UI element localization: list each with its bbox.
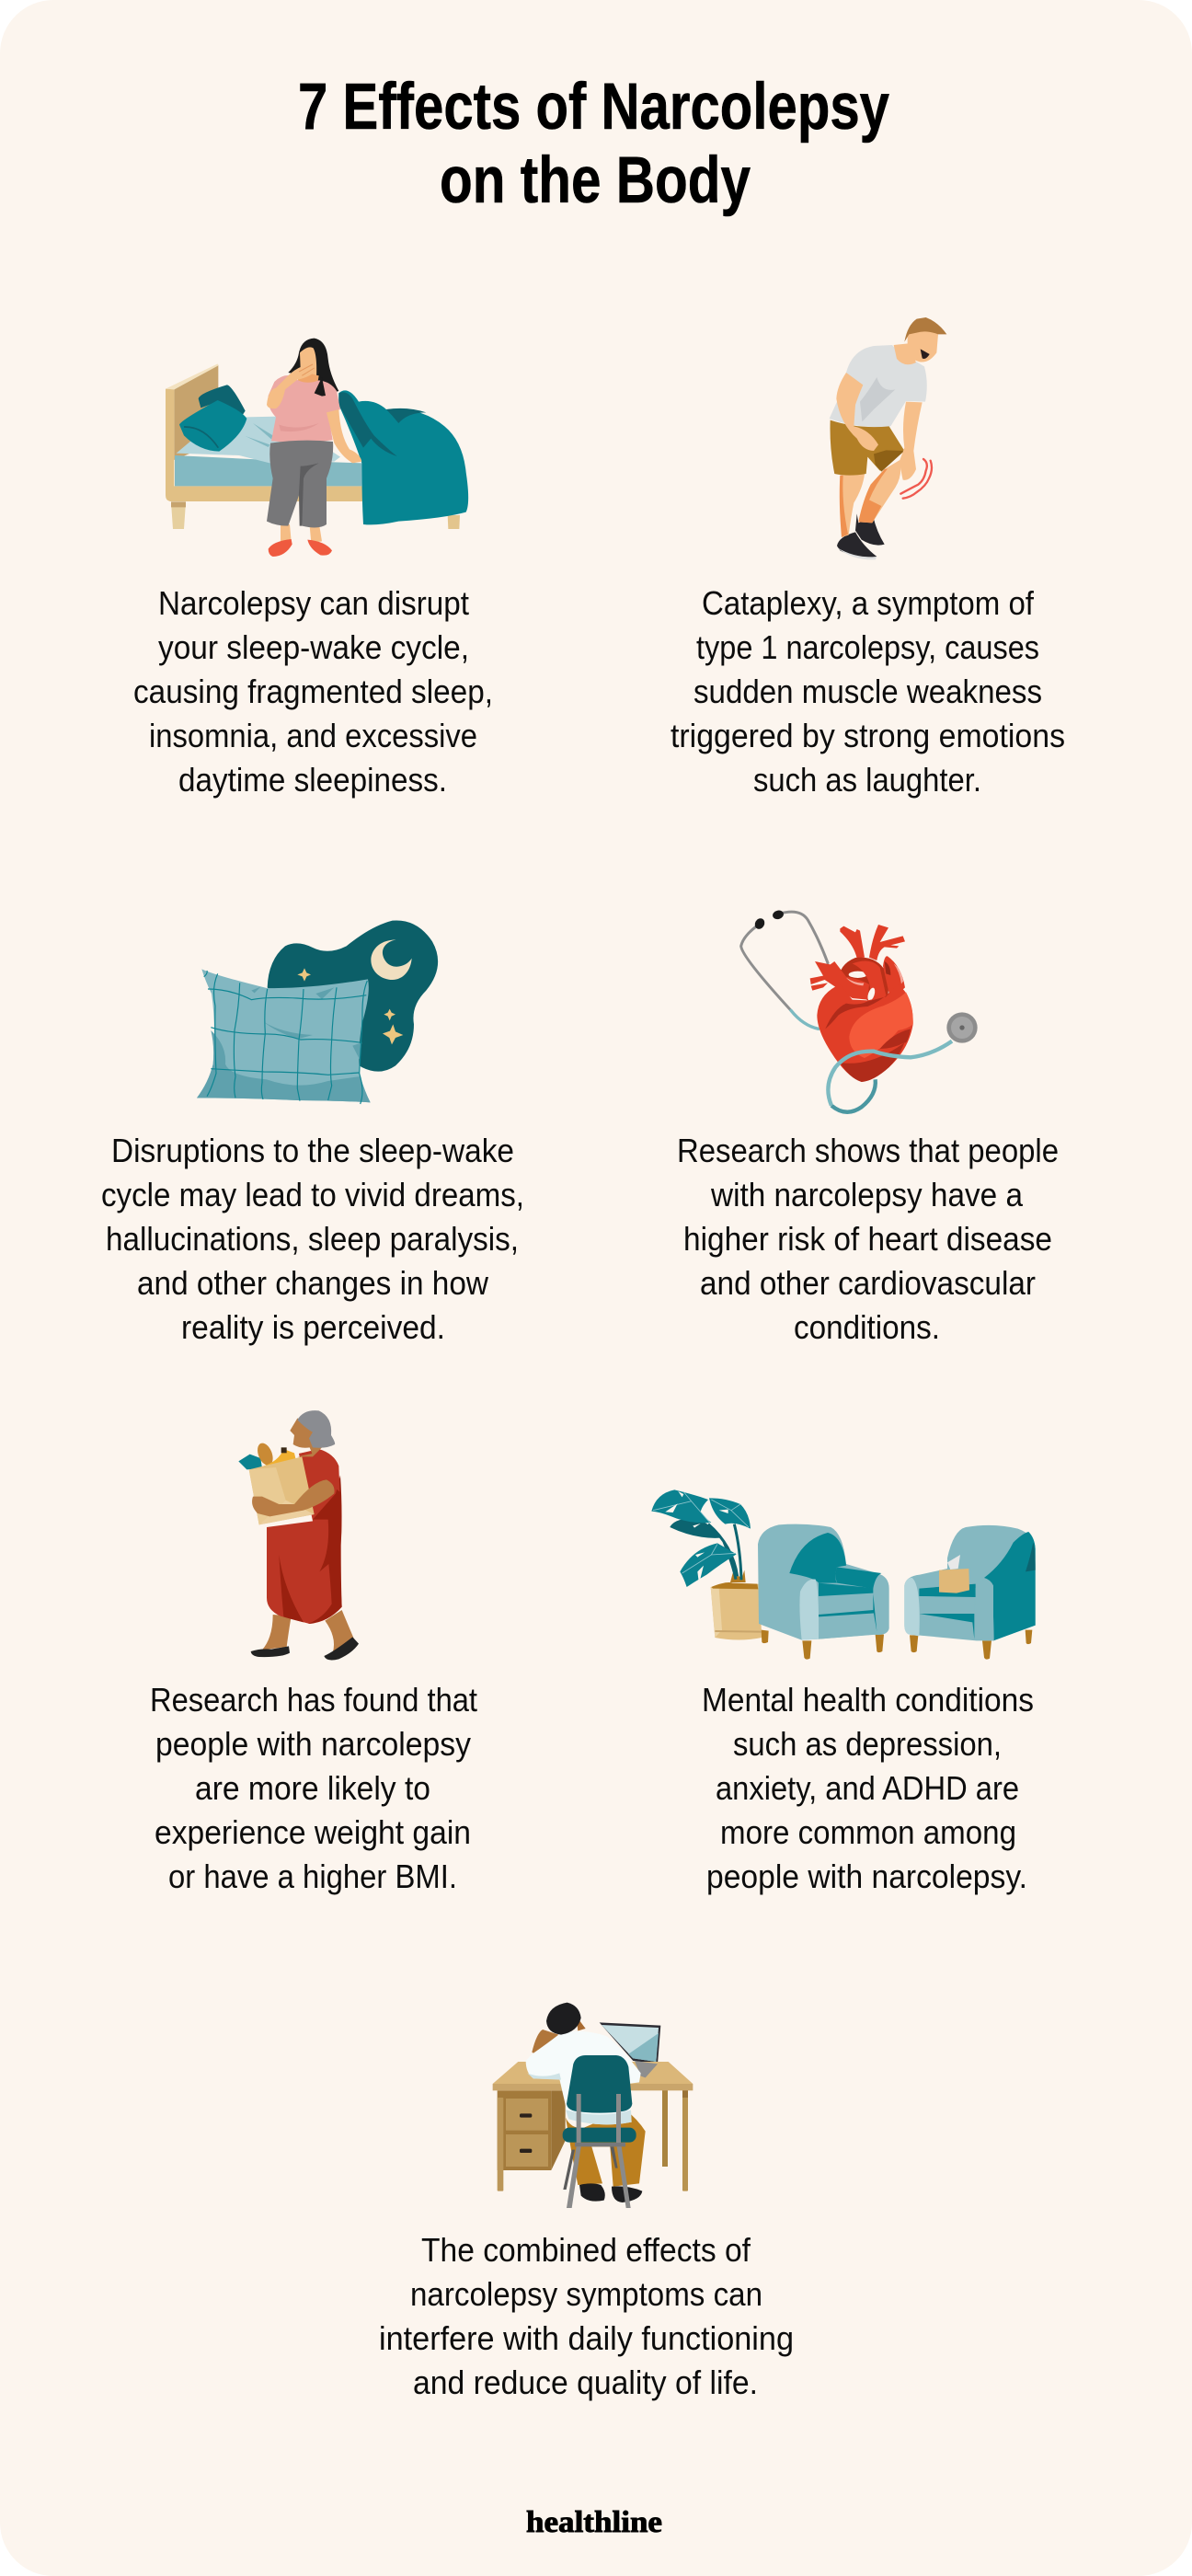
text: cataplexy: sudden muscle weakness <box>693 673 1042 710</box>
man <box>526 2003 646 2202</box>
legs and shoes <box>251 1610 359 1660</box>
text: quality of life: narcolepsy symptoms can <box>410 2275 762 2313</box>
text: cataplexy: type 1 narcolepsy, causes <box>696 628 1039 666</box>
pillow <box>197 969 371 1104</box>
text: quality of life: and reduce quality of life. <box>413 2363 758 2401</box>
text: quality of life: interfere with daily functioning <box>379 2319 794 2357</box>
shirt <box>830 345 927 427</box>
arm and hand <box>252 1479 335 1516</box>
arms <box>836 373 923 480</box>
illustration: man slumped at desk <box>493 2003 693 2208</box>
text: mental health <box>702 1681 1034 1895</box>
shorts <box>831 420 904 476</box>
healthline logo: healthline <box>526 2506 662 2539</box>
laptop base <box>635 2061 658 2077</box>
text: cataplexy: Cataplexy, a symptom of <box>702 584 1035 622</box>
text: heart disease: conditions. <box>794 1308 940 1346</box>
neck <box>894 343 916 364</box>
text: heart disease: higher risk of heart disease <box>683 1220 1052 1258</box>
text: weight gain: are more likely to <box>195 1769 430 1807</box>
illustration: woman carrying groceries <box>238 1410 359 1660</box>
illustration: therapy chairs and plant <box>651 1489 1036 1660</box>
text: weight gain: experience weight gain <box>155 1813 471 1851</box>
text: cataplexy: triggered by strong emotions <box>670 717 1065 754</box>
text: vivid dreams: cycle may lead to vivid dreams, <box>101 1176 524 1213</box>
text: vivid dreams: and other changes in how <box>137 1264 489 1302</box>
legs <box>840 460 900 537</box>
text: vivid dreams <box>101 1132 524 1346</box>
text: heart disease <box>677 1132 1059 1346</box>
stars <box>297 968 403 1044</box>
text: quality of life: The combined effects of <box>421 2231 751 2269</box>
pain squiggles <box>900 459 932 499</box>
grocery bag <box>249 1456 315 1524</box>
dress <box>267 1449 342 1624</box>
shirt shade <box>860 377 895 421</box>
left armchair <box>758 1524 889 1660</box>
text: vivid dreams: reality is perceived. <box>181 1308 445 1346</box>
text: mental health: such as depression, <box>733 1725 1002 1763</box>
text: vivid dreams: Disruptions to the sleep-wake <box>111 1132 514 1169</box>
laptop <box>600 2022 660 2064</box>
text: sleep-wake cycle: daytime sleepiness. <box>178 761 447 799</box>
heart body <box>817 984 913 1082</box>
text: weight gain: Research has found that <box>150 1681 477 1719</box>
moon <box>371 939 412 980</box>
text: mental health: more common among <box>720 1813 1016 1851</box>
stethoscope ear tubes <box>741 912 828 1029</box>
title: 7 Effects of Narcolepsy <box>298 71 889 144</box>
text: mental health: anxiety, and ADHD are <box>716 1769 1019 1807</box>
illustration: man with weak knees <box>830 317 946 559</box>
head <box>904 317 946 362</box>
text: mental health: Mental health conditions <box>702 1681 1034 1719</box>
stethoscope main tube <box>828 1041 952 1112</box>
shoes <box>837 513 885 559</box>
text: heart disease: with narcolepsy have a <box>710 1176 1024 1213</box>
night sky blob <box>268 920 438 1072</box>
blanket <box>338 390 468 524</box>
text: weight gain: people with narcolepsy <box>155 1725 471 1763</box>
text: vivid dreams: hallucinations, sleep paralysis, <box>106 1220 519 1258</box>
text: heart disease: and other cardiovascular <box>700 1264 1036 1302</box>
right armchair <box>904 1525 1036 1660</box>
illustration: woman on bed <box>166 339 468 557</box>
earpieces <box>753 909 785 931</box>
illustration: heart and stethoscope <box>741 909 978 1112</box>
text: sleep-wake cycle: causing fragmented sleep, <box>133 673 493 710</box>
pillows <box>179 385 246 452</box>
tissue box <box>939 1555 969 1593</box>
bed frame <box>166 363 460 529</box>
text: weight gain: or have a higher BMI. <box>168 1857 457 1895</box>
illustration: pillow and night sky <box>197 920 438 1104</box>
text: cataplexy <box>670 584 1065 799</box>
text: heart disease: Research shows that people <box>677 1132 1059 1169</box>
heart vessels <box>810 925 905 1002</box>
head <box>290 1410 335 1456</box>
groceries <box>238 1441 297 1469</box>
mattress <box>175 417 361 486</box>
chair <box>563 2055 636 2208</box>
text: sleep-wake cycle: Narcolepsy can disrupt <box>158 584 469 622</box>
text: quality of life <box>379 2231 794 2401</box>
text: cataplexy: such as laughter. <box>753 761 981 799</box>
text: sleep-wake cycle: insomnia, and excessive <box>149 717 477 754</box>
woman <box>267 339 361 557</box>
text: sleep-wake cycle: your sleep-wake cycle, <box>158 628 469 666</box>
title <box>298 71 889 217</box>
text: mental health: people with narcolepsy. <box>706 1857 1027 1895</box>
text: sleep-wake cycle <box>133 584 493 799</box>
text: weight gain <box>150 1681 477 1895</box>
chest piece <box>946 1012 978 1043</box>
potted plant <box>651 1489 762 1639</box>
desk <box>493 2062 693 2191</box>
title: on the Body <box>440 144 751 217</box>
